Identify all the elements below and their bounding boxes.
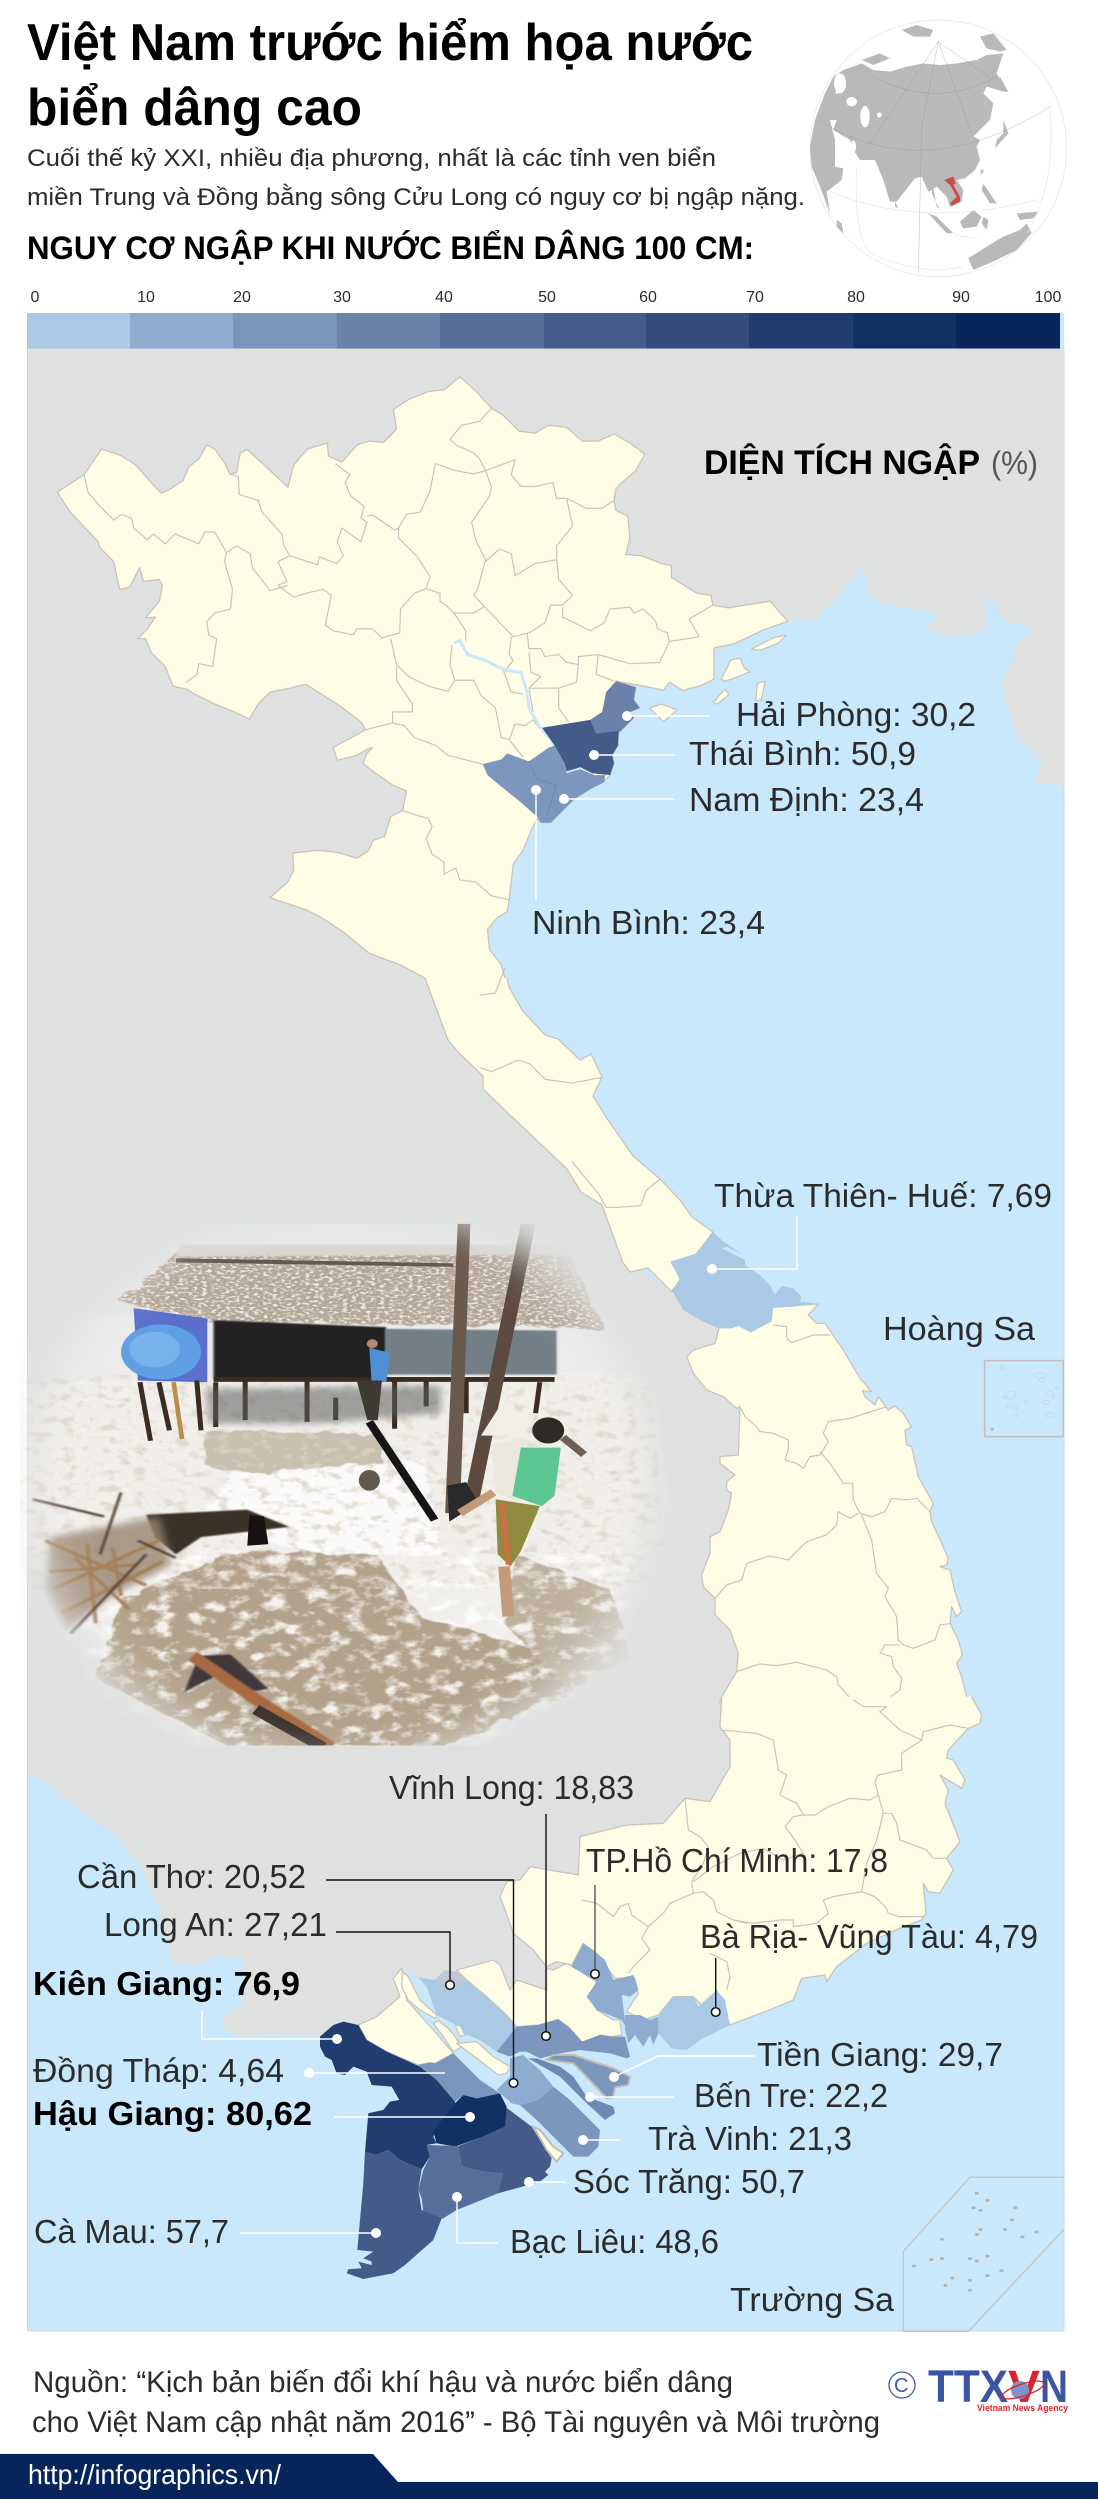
neighbouring land	[28, 349, 1064, 2037]
province value labels: Ninh Bình: 23,4	[532, 904, 765, 941]
province borders central	[715, 1325, 952, 1703]
icon: locator globe	[810, 20, 1067, 277]
title	[27, 14, 753, 137]
heading: flooded area: (%)	[991, 445, 1038, 481]
province value labels: Bến Tre: 22,2	[694, 2077, 888, 2114]
province value labels: Hoàng Sa	[883, 1310, 1036, 1347]
legend: flood scale: 90	[952, 289, 970, 306]
title: Việt Nam trước hiểm họa nước	[27, 14, 753, 72]
Hải Phòng	[590, 681, 640, 734]
legend: flood scale: 70	[746, 289, 764, 306]
logo: TTXVN	[889, 2361, 1069, 2414]
panel: map	[0, 349, 1064, 2331]
Cù Lao Dung island	[533, 2127, 563, 2162]
logo: TTXVN: C	[894, 2375, 908, 2397]
province value labels: Long An: 27,21	[104, 1906, 327, 1943]
subtitle text: miền Trung và Đồng bằng sông Cửu Long có nguy cơ bị ngập nặng.	[27, 184, 805, 211]
Ninh Bình and Nam Định	[483, 746, 605, 823]
province value labels: Thái Bình: 50,9	[689, 735, 916, 772]
province value labels	[33, 696, 1052, 2318]
subtitle text: Cuối thế kỷ XXI, nhiều địa phương, nhất là các tỉnh ven biển	[27, 145, 716, 172]
Trà Vinh	[520, 2087, 600, 2157]
province value labels: Tiền Giang: 29,7	[757, 2036, 1003, 2073]
subtitle text	[27, 145, 805, 211]
Sóc Trăng	[458, 2107, 552, 2193]
province value labels: Cần Thơ: 20,52	[77, 1858, 306, 1895]
central Vietnam land north	[425, 968, 713, 1292]
heading: flooded area: DIỆN TÍCH NGẬP	[704, 444, 980, 482]
footer bar	[0, 2454, 1098, 2499]
source note	[32, 2366, 880, 2439]
Thừa Thiên - Huế	[670, 1232, 817, 1332]
Kiên Giang	[320, 2022, 457, 2169]
Vĩnh Long	[497, 2055, 553, 2105]
province value labels: Trường Sa	[730, 2281, 895, 2318]
province borders north	[84, 408, 713, 900]
legend: flood scale	[27, 289, 1064, 349]
legend: flood scale: 60	[639, 289, 657, 306]
photo: flooded stilt house	[20, 1224, 654, 1746]
province value labels: TP.Hồ Chí Minh: 17,8	[586, 1842, 888, 1879]
Hoàng Sa inset	[985, 1361, 1063, 1437]
Mekong delta provinces	[320, 1943, 730, 2279]
province value labels: Cà Mau: 57,7	[34, 2213, 229, 2250]
north Vietnam land	[57, 377, 788, 980]
Bến Tre	[547, 2055, 630, 2098]
textures over water and thatch	[20, 1375, 680, 1761]
province value labels: Sóc Trăng: 50,7	[573, 2163, 805, 2200]
province value labels: Trà Vinh: 21,3	[648, 2120, 852, 2157]
province value labels: Vĩnh Long: 18,83	[389, 1769, 634, 1806]
title: biển dâng cao	[27, 79, 362, 137]
legend: flood scale: 0	[31, 289, 40, 306]
Truong Sa inset	[903, 2177, 1064, 2331]
Red River	[454, 641, 594, 773]
leader lines and dots	[202, 711, 797, 2243]
Bạc Liêu	[418, 2145, 503, 2220]
province fills: Red River delta	[483, 681, 640, 823]
province value labels: Bạc Liêu: 48,6	[510, 2223, 719, 2260]
province borders south	[582, 1700, 968, 1990]
Long An area	[418, 1970, 517, 2052]
legend: flood scale: 50	[538, 289, 556, 306]
province value labels: Đồng Tháp: 4,64	[33, 2052, 284, 2089]
Đồng Tháp	[418, 2053, 500, 2102]
legend: flood scale: 10	[137, 289, 155, 306]
province value labels: Hải Phòng: 30,2	[736, 696, 976, 733]
central Vietnam land south	[670, 1232, 1063, 1703]
province value labels: Nam Định: 23,4	[689, 781, 924, 818]
islands: Quang Ninh	[713, 635, 786, 704]
province value labels: Kiên Giang: 76,9	[33, 1965, 300, 2002]
An Giang land	[358, 1968, 453, 2065]
legend: flood scale: 20	[233, 289, 251, 306]
sea	[28, 349, 1064, 2331]
section heading: NGUY CƠ NGẬP KHI NƯỚC BIỂN DÂNG 100 CM:	[27, 230, 754, 266]
legend: flood scale: 80	[847, 289, 865, 306]
province value labels: Thừa Thiên- Huế: 7,69	[714, 1177, 1052, 1214]
legend: flood scale: 30	[333, 289, 351, 306]
northern islands	[650, 704, 677, 722]
southern Vietnam land	[500, 1697, 982, 2025]
logo: TTXVN: Vietnam News Agency	[977, 2403, 1069, 2414]
Long An upper land	[457, 1960, 622, 2043]
Tiền Giang	[497, 2019, 630, 2058]
Hậu Giang	[433, 2093, 507, 2147]
province value labels: Bà Rịa- Vũng Tàu: 4,79	[700, 1918, 1038, 1955]
Cà Mau	[347, 2150, 442, 2279]
footer bar: http://infographics.vn/	[28, 2459, 281, 2490]
source note: Nguồn: “Kịch bản biến đổi khí hậu và nước biển dâng	[33, 2366, 733, 2399]
source note: cho Việt Nam cập nhật năm 2016” - Bộ Tài nguyên và Môi trường	[32, 2406, 880, 2439]
logo: TTXVN: V	[1008, 2361, 1040, 2412]
Thái Bình	[542, 720, 619, 775]
legend: flood scale: 40	[435, 289, 453, 306]
province value labels: Hậu Giang: 80,62	[33, 2095, 312, 2132]
Bà Rịa-Vũng Tàu west	[625, 2015, 658, 2047]
TP.HCM	[572, 1943, 638, 2028]
logo: TTXVN: N	[1040, 2361, 1068, 2412]
logo: TTXVN: TTX	[928, 2361, 1008, 2412]
legend: flood scale: 100	[1035, 289, 1061, 306]
